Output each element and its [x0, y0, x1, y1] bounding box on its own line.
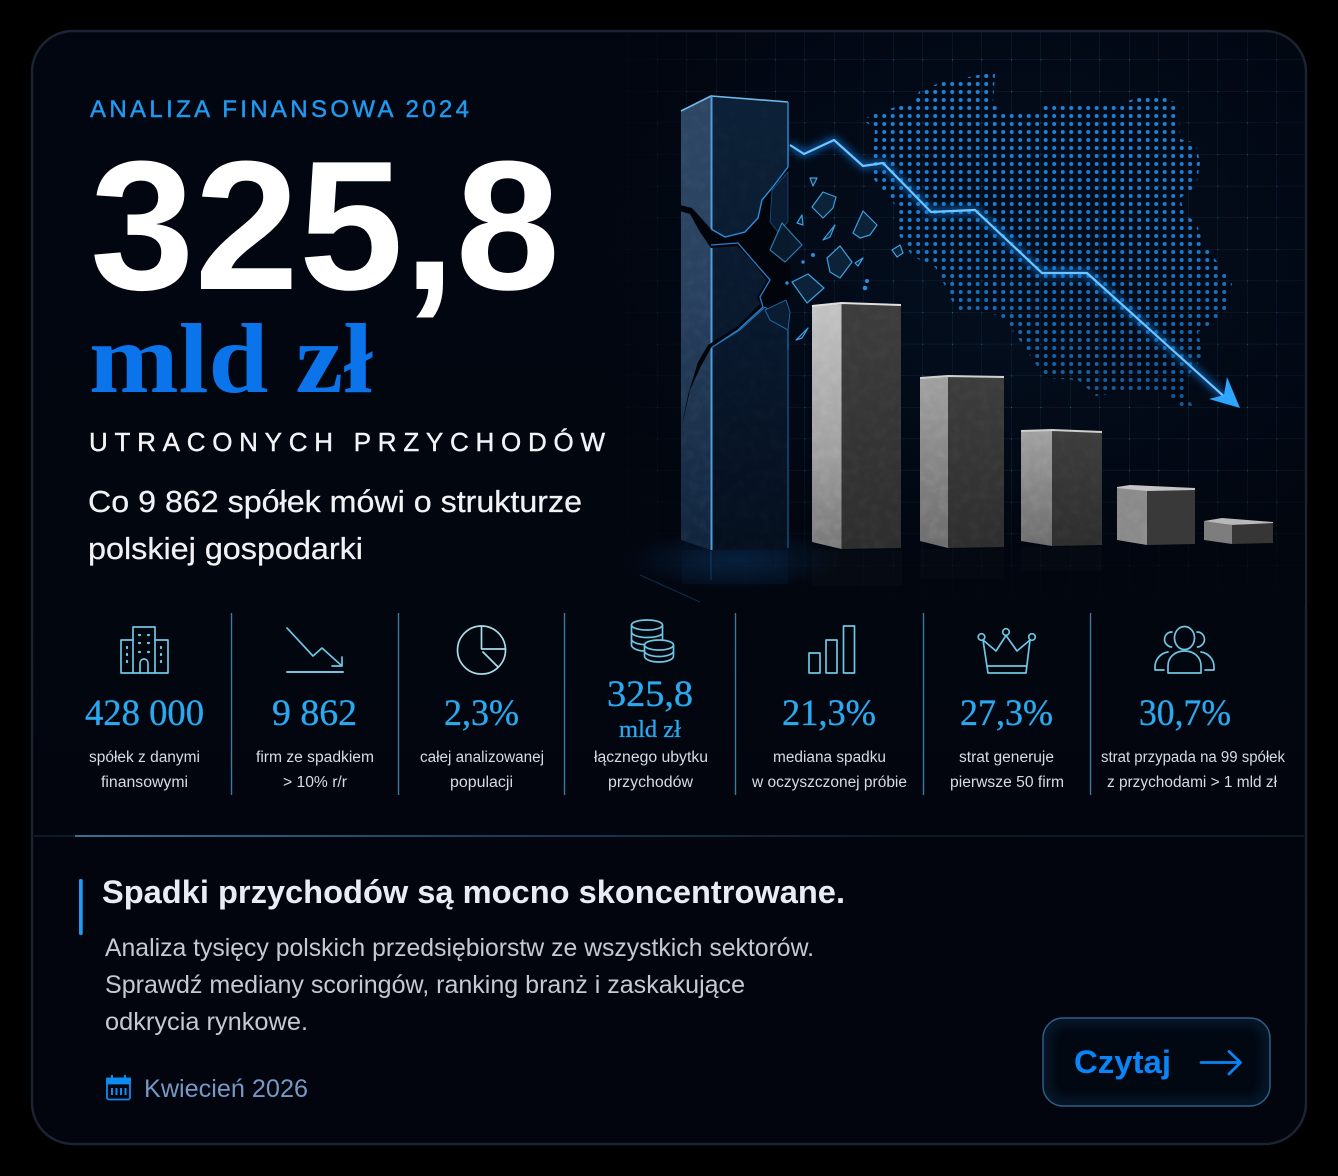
stat: 30,7% strat: strat przypada na 99 spółek: [1101, 749, 1285, 766]
stat: 9 862 firm: 9 862: [272, 693, 357, 734]
icon: crown: [978, 629, 1035, 673]
bar 3: [920, 376, 1004, 548]
body text: Analiza tysięcy polskich przedsiębiorstw ze wszystkich sektorów.: [105, 934, 814, 962]
stat: 325,8 mld zł ubytku: łącznego ubytku: [594, 749, 708, 766]
icon: calendar: [107, 1075, 130, 1100]
crack void: [680, 165, 790, 430]
button: Czytaj: Czytaj: [1074, 1044, 1171, 1080]
flying shards: [785, 178, 903, 340]
body text: [105, 934, 814, 1036]
icon: bar chart: [809, 626, 854, 673]
body text: Sprawdź mediany scoringów, ranking branż i zaskakujące: [105, 971, 745, 999]
stat: 9 862 firm: firm ze spadkiem: [256, 749, 374, 766]
accent bar: [79, 879, 83, 935]
bar 5: [1117, 485, 1195, 545]
declining arrow line: [790, 140, 1240, 408]
body text: odkrycia rynkowe.: [105, 1008, 308, 1036]
stat: 325,8 mld zł ubytku: przychodów: [608, 774, 694, 791]
stat: 325,8 mld zł ubytku: 325,8: [607, 674, 693, 715]
stat: 2,3% populacji: całej analizowanej: [420, 749, 544, 766]
stat: 428 000 spółek: 428 000: [85, 693, 204, 734]
stat: 21,3% mediana: [751, 626, 907, 791]
stat: 428 000 spółek: [85, 627, 204, 791]
stat: 27,3% strat: strat generuje: [959, 749, 1054, 766]
stat: 27,3% strat: pierwsze 50 firm: [950, 774, 1064, 791]
bar 4: [1021, 430, 1102, 546]
stat: 9 862 firm: > 10% r/r: [283, 774, 347, 791]
intro text: polskiej gospodarki: [88, 532, 363, 566]
hero illustration: falling bars over dotted map: [590, 32, 1306, 605]
stat: 2,3% populacji: [420, 626, 544, 791]
stat: 428 000 spółek: finansowymi: [101, 774, 188, 791]
headline unit: mld zł: [89, 303, 373, 414]
icon: coins: [632, 620, 674, 662]
date: Kwiecień 2026: [144, 1075, 308, 1103]
headline number: 325,8: [90, 122, 560, 328]
stat: 2,3% populacji: 2,3%: [444, 693, 519, 734]
icon: building: [121, 627, 168, 673]
section heading: Spadki przychodów są mocno skoncentrowane.: [102, 874, 845, 910]
cracked blue bar: [680, 95, 802, 550]
stat: 30,7% strat: [1101, 626, 1285, 791]
intro text: [88, 485, 582, 566]
subheading: utraconych przychodów: UTRACONYCH PRZYCHODÓW: [89, 427, 605, 457]
stat: 2,3% populacji: populacji: [450, 774, 513, 791]
icon: falling chart: [287, 628, 343, 672]
stat: 325,8 mld zł ubytku: [594, 620, 708, 791]
intro text: Co 9 862 spółek mówi o strukturze: [88, 485, 582, 519]
eyebrow: Analiza finansowa 2024: ANALIZA FINANSOWA 2024: [90, 96, 469, 123]
stat: 30,7% strat: 30,7%: [1139, 693, 1231, 734]
bar 2: [812, 303, 901, 549]
icon: pie chart: [458, 626, 506, 674]
stat: 21,3% mediana: w oczyszczonej próbie: [751, 774, 907, 791]
dotted map of Poland: [860, 70, 1235, 415]
section divider: [34, 835, 1304, 837]
icon: arrow right: [1201, 1052, 1240, 1074]
stat: 21,3% mediana: mediana spadku: [773, 749, 886, 766]
floor glow and reflections: [640, 540, 828, 602]
stat: 428 000 spółek: spółek z danymi: [89, 749, 200, 766]
stat: 30,7% strat: z przychodami > 1 mld zł: [1107, 774, 1278, 791]
icon: people: [1155, 626, 1214, 673]
stat: 27,3% strat: 27,3%: [960, 693, 1053, 734]
stat: 21,3% mediana: 21,3%: [782, 693, 876, 734]
button: Czytaj: [1043, 1018, 1270, 1106]
bar 6: [1204, 518, 1273, 544]
stat: 325,8 mld zł ubytku: mld zł: [619, 717, 681, 743]
stat: 27,3% strat: [950, 629, 1064, 791]
stat: 9 862 firm: [256, 628, 374, 791]
